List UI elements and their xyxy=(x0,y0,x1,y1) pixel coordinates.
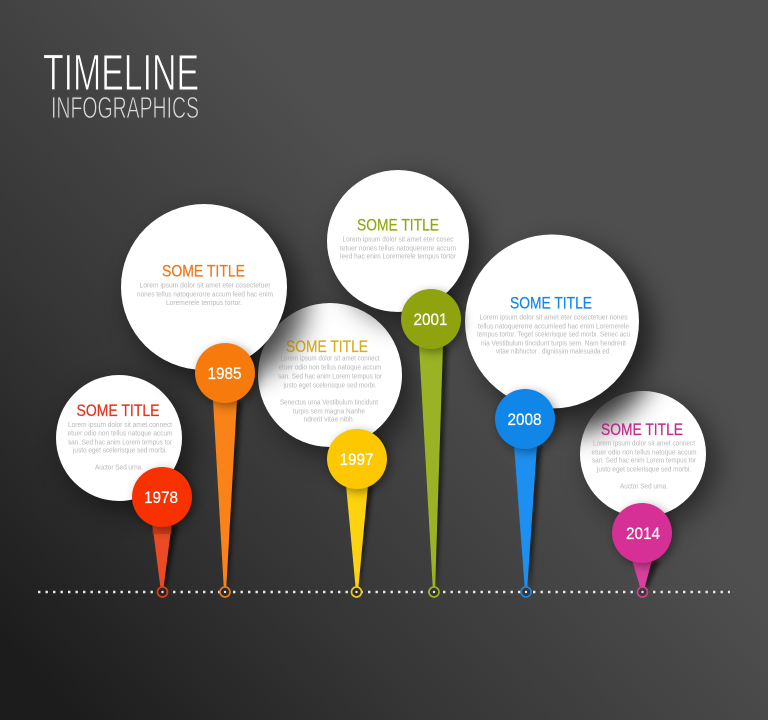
panel: 1997 bubble: ndrerit vitae nibh. xyxy=(304,416,355,424)
panel: 2008 bubble: SOME TITLE xyxy=(510,294,592,312)
panel: 1997 bubble: etuer odio non tellus natoque accum xyxy=(278,364,382,372)
panel: 2014 bubble: san. Sed hac enim Lorem tempus tor xyxy=(592,458,697,464)
panel: 1985 bubble: nones tellus natoquerorre accum leed hac enim xyxy=(137,292,273,298)
marker: 1978: 1978 xyxy=(144,488,178,507)
panel: 1997 bubble: Senectus urna Vestibulum tincidunt xyxy=(280,400,378,406)
title: TIMELINE xyxy=(43,44,199,101)
panel: 1978 bubble xyxy=(56,375,191,510)
panel: 2008 bubble xyxy=(465,234,652,421)
marker: 1978 xyxy=(132,467,195,597)
marker: 2001 xyxy=(401,289,464,597)
marker: 2014 xyxy=(612,503,675,597)
panel: 1978 bubble: justo eget scelerisque sed morbi. xyxy=(72,448,167,454)
panel: 2001 bubble: SOME TITLE xyxy=(357,216,439,234)
panel: 2014 bubble: justo eget scelerisque sed morbi. xyxy=(596,466,691,474)
panel: 2008 bubble: tempus tortor. Teget scelerisque sed morbi. Senec acu xyxy=(477,332,630,338)
panel: 2001 bubble xyxy=(327,170,480,323)
marker: 2008: 2008 xyxy=(508,410,542,429)
panel: 1997 bubble: justo eget scelerisque sed morbi. xyxy=(283,382,377,390)
marker: 1997 xyxy=(327,429,390,597)
panel: 1978 bubble: Lorem ipsum dolor sit amet connect xyxy=(68,422,172,429)
panel: 1985 bubble xyxy=(121,204,299,382)
panel: 1997 bubble: Lorem ipsum dolor sit amet connect xyxy=(280,356,380,362)
marker: 2008 xyxy=(495,389,558,597)
panel: 2014 bubble: SOME TITLE xyxy=(601,420,683,439)
subtitle: INFOGRAPHICS xyxy=(51,90,199,125)
marker: 2014: 2014 xyxy=(626,524,660,543)
panel: 1997 bubble: san. Sed hac anim Lorem tempus tor xyxy=(278,374,383,380)
marker: 1985: 1985 xyxy=(208,364,242,383)
panel: 1978 bubble: Auctor Sed urna. xyxy=(95,464,143,472)
panel: 1997 bubble: turpis sem magna Nanhe xyxy=(293,408,365,416)
panel: 2014 bubble: etuer odio non tellus natoque accum xyxy=(592,450,697,456)
title xyxy=(43,44,199,125)
panel: 1978 bubble: etuer odio non tellus natoque accum xyxy=(68,430,173,438)
marker: 1997: 1997 xyxy=(340,450,374,469)
panel: 2014 bubble: Auctor Sed urna. xyxy=(620,484,668,490)
marker: 2001: 2001 xyxy=(414,310,448,329)
panel: 1978 bubble: san. Sed hac anim Lorem tempus tor xyxy=(68,440,173,446)
panel: 2008 bubble: Lorem ipsum dolor sit amet eter cosectetuer nones xyxy=(480,314,628,322)
panel: 1997 bubble: SOME TITLE xyxy=(286,337,368,356)
panel: 1985 bubble: Loremerele tempus tortor. xyxy=(166,300,242,307)
panel: 2001 bubble: leed hac enim Loremerele tempus tortor xyxy=(340,254,457,260)
panel: 2008 bubble: nia Vestibulum tincidunt turpis sem. Nam hendrerit xyxy=(481,340,626,348)
panel: 2001 bubble: tetuer nones tellus natoquererre accum xyxy=(340,246,456,252)
panel: 1985 bubble: SOME TITLE xyxy=(162,262,245,280)
panel: 2014 bubble: Lorem ipsum dolor sit amet connect xyxy=(593,440,695,448)
panel: 2014 bubble xyxy=(580,390,725,531)
panel: 2008 bubble: tellus natoquererre accumleed hac enim Loremerele xyxy=(478,324,629,330)
panel: 1985 bubble: Lorem ipsum dolor sit amet eter cosectetuer xyxy=(140,282,271,290)
timeline dotted axis xyxy=(38,591,730,593)
panel: 1997 bubble xyxy=(258,303,421,464)
marker: 1985 xyxy=(195,343,258,597)
panel: 1978 bubble: SOME TITLE xyxy=(76,401,160,420)
panel: 2001 bubble: Lorem ipsum dolor sit amet eter cosec xyxy=(342,236,454,244)
panel: 2008 bubble: vitae nibhuctor . dignissim malesuada ed. xyxy=(496,348,611,356)
